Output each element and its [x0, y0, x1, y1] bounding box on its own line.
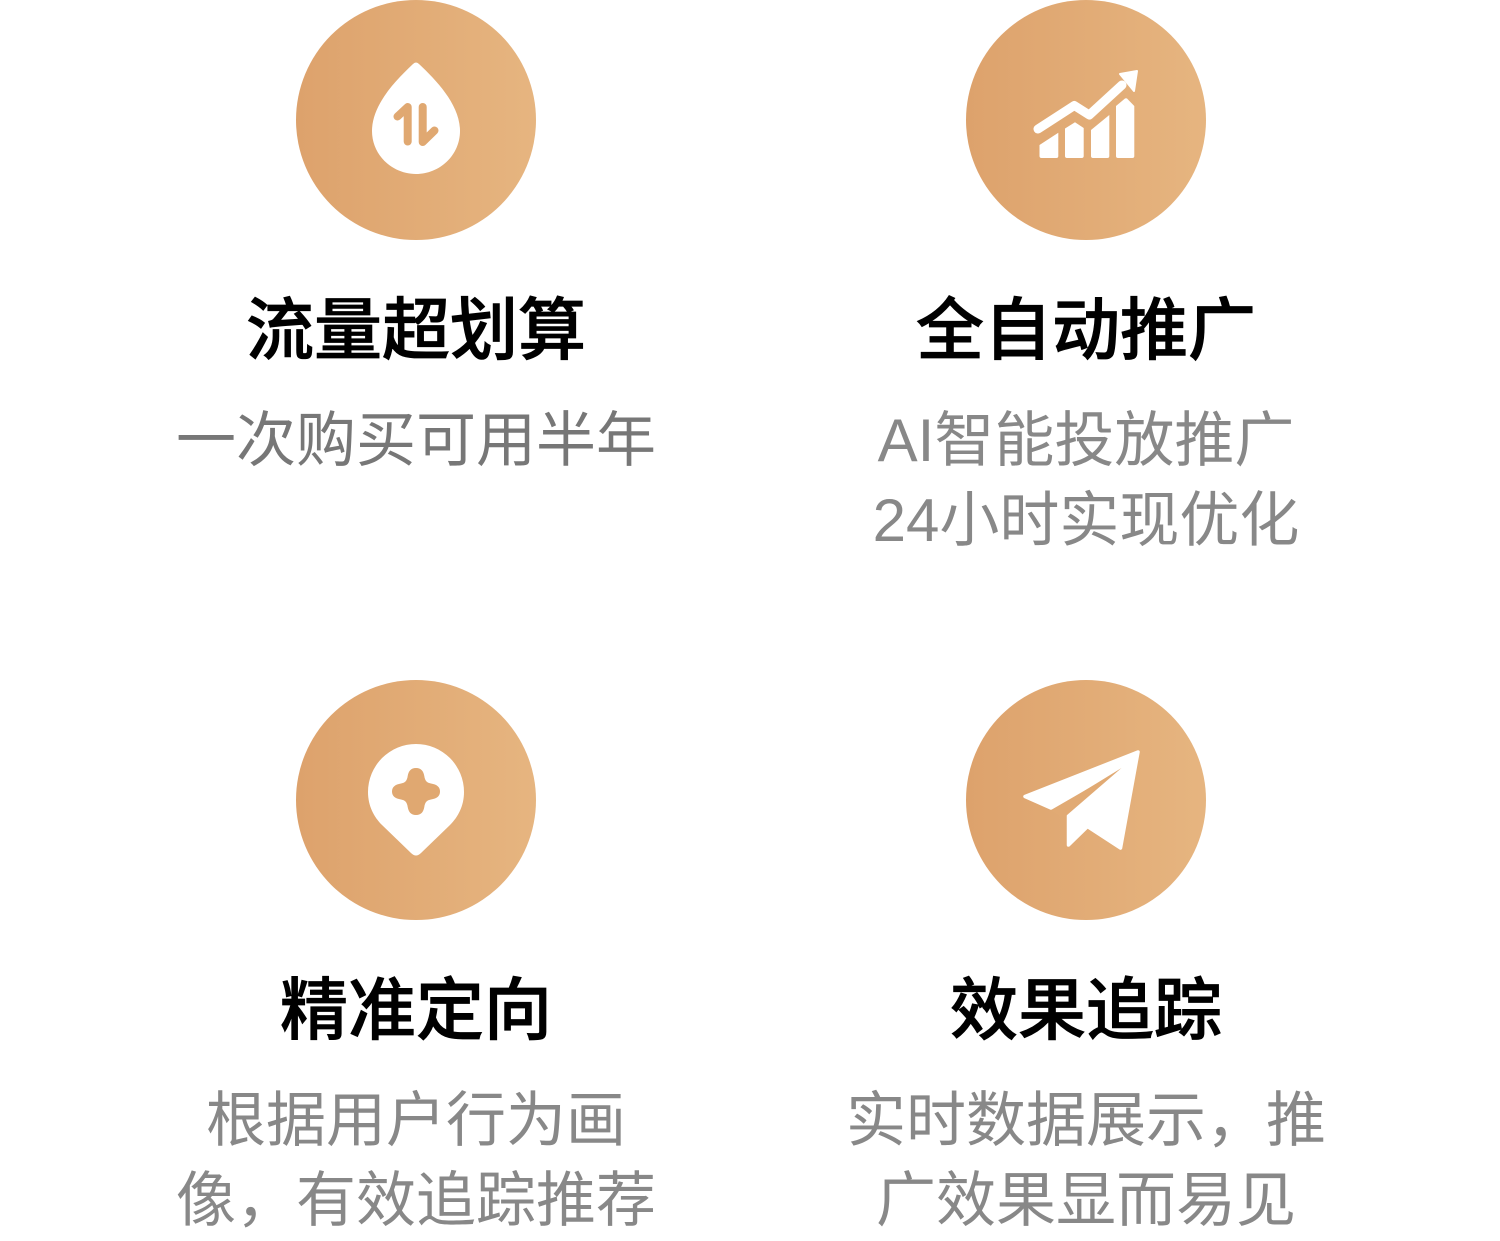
text block: 广效果显而易见: [876, 1167, 1296, 1234]
text block: 一次购买可用半年: [176, 407, 656, 474]
heading: 效果追踪: [950, 972, 1222, 1048]
panel: 精准定向: [176, 680, 656, 1234]
icon: rising bar chart with arrow: [966, 0, 1206, 240]
heading: 精准定向: [280, 972, 552, 1048]
heading: 全自动推广: [916, 292, 1256, 368]
text block: 24小时实现优化: [873, 487, 1299, 554]
text block: [846, 1087, 1326, 1234]
panel: 流量超划算: [176, 0, 656, 474]
panel: 全自动推广: [873, 0, 1299, 554]
text block: [873, 407, 1299, 554]
text block: 根据用户行为画: [206, 1087, 626, 1154]
icon: map pin with cross: [296, 680, 536, 920]
text block: 实时数据展示，推: [846, 1087, 1326, 1154]
text block: 像，有效追踪推荐: [176, 1167, 656, 1234]
icon: water drop with up/down arrows: [296, 0, 536, 240]
text block: [176, 1087, 656, 1234]
icon: paper plane: [966, 680, 1206, 920]
panel: 效果追踪: [846, 680, 1326, 1234]
text block: AI智能投放推广: [878, 407, 1294, 474]
heading: 流量超划算: [246, 292, 586, 368]
